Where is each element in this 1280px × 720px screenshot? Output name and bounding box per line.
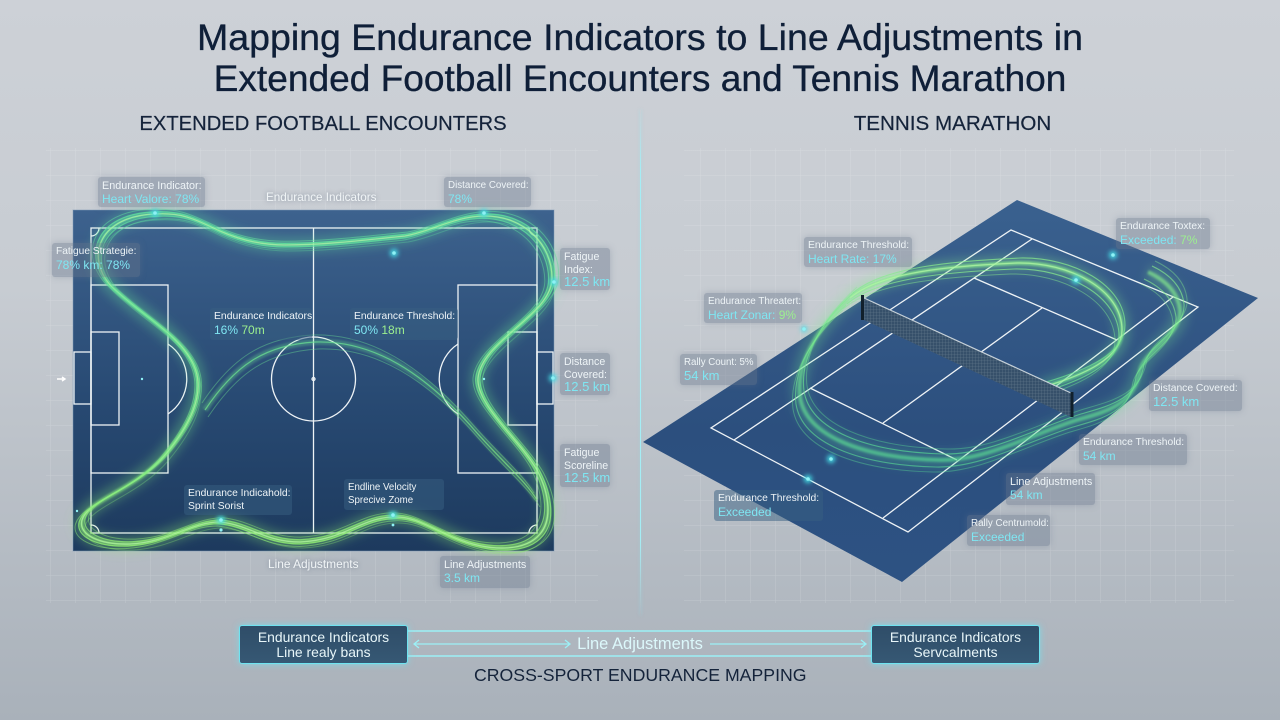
callout: line adjustments: 54 km <box>1010 488 1043 502</box>
callout: heart zone: Heart Zonar: 9% <box>708 308 796 322</box>
callout: distance right <box>560 353 610 395</box>
callout: heart value <box>98 177 205 207</box>
endurance flow: football <box>75 209 559 554</box>
callout: threshold on pitch <box>350 308 458 340</box>
callout: distance covered: Distance Covered: <box>448 180 529 191</box>
callout: threshold on pitch: Endurance Threshold: <box>354 311 455 322</box>
callout: fatigue <box>52 243 140 277</box>
pitch markings <box>74 228 553 533</box>
callout: fatigue scoreline: Fatigue <box>564 447 599 459</box>
callout: heart zone: Endurance Threatert: <box>708 296 801 307</box>
callout: fatigue: Fatigue Strategie: <box>56 246 136 257</box>
callout: threshold on pitch: 50% 18m <box>354 323 405 337</box>
callout: sprint <box>184 485 292 515</box>
callout: heart rate: Heart Rate: 17% <box>808 252 897 266</box>
label: line adjustments: Line Adjustments <box>268 557 359 571</box>
callout: exceeded top: Endurance Toxtex: <box>1120 221 1205 232</box>
data points: tennis <box>801 251 1117 483</box>
callout: velocity: Sprecive Zome <box>348 495 413 506</box>
callout: line adjustments: 3.5 km <box>444 571 480 585</box>
callout: rally exceeded: Exceeded <box>971 530 1024 544</box>
callout: fatigue scoreline: Scoreline <box>564 460 608 472</box>
box: right endpoint <box>871 625 1040 664</box>
callout: fatigue index: Fatigue <box>564 251 599 263</box>
box: right endpoint: Endurance Indicators <box>890 629 1021 645</box>
data points: football <box>76 209 558 532</box>
pitch surface <box>73 210 554 551</box>
panel: tennis court <box>643 148 1258 603</box>
grid: football backdrop <box>46 148 598 603</box>
box: left endpoint <box>239 625 408 664</box>
callout: exceeded top <box>1116 218 1210 249</box>
callout: heart value: Endurance Indicator: <box>102 180 202 192</box>
title <box>197 16 1083 99</box>
callout: threshold km <box>1079 434 1187 465</box>
callout: threshold exceeded: Endurance Threshold: <box>718 493 819 504</box>
callout: heart rate <box>804 237 912 267</box>
box: left endpoint: Line realy bans <box>276 644 371 660</box>
callout: distance covered <box>444 177 531 207</box>
callout: threshold exceeded: Exceeded <box>718 505 771 519</box>
callout: fatigue index: Index: <box>564 264 593 276</box>
callout: line adjustments <box>1006 473 1095 505</box>
callout: heart rate: Endurance Threshold: <box>808 240 909 251</box>
callout: distance covered <box>1149 380 1242 411</box>
endurance flow: tennis <box>792 258 1187 472</box>
callout: exceeded top: Exceeded: 7% <box>1120 233 1197 247</box>
callout: fatigue index <box>560 248 610 290</box>
callout: rally exceeded: Rally Centrumold: <box>971 518 1049 529</box>
net <box>862 295 1072 417</box>
grid: tennis backdrop <box>684 148 1234 603</box>
vertical divider <box>640 110 641 615</box>
title: Mapping Endurance Indicators to Line Adjustments in <box>197 16 1083 58</box>
caption: CROSS-SPORT ENDURANCE MAPPING <box>474 665 807 685</box>
label: endurance indicators: Endurance Indicators <box>266 191 376 204</box>
callout: rally count <box>680 354 757 385</box>
title: Extended Football Encounters and Tennis Marathon <box>214 57 1066 99</box>
callout: fatigue: 78% km: 78% <box>56 258 130 272</box>
callout: distance covered: 78% <box>448 192 472 206</box>
callout: fatigue scoreline: 12.5 km <box>564 470 610 485</box>
callout: distance covered: Distance Covered: <box>1153 383 1238 394</box>
callout: sprint: Sprint Sorist <box>188 501 244 512</box>
callout: rally count: Rally Count: 5% <box>684 357 753 368</box>
callout: velocity: Endline Velocity <box>348 482 416 493</box>
callout: threshold km: Endurance Threshold: <box>1083 437 1184 448</box>
box: left endpoint: Endurance Indicators <box>258 629 389 645</box>
callout: indicators on pitch <box>210 308 312 340</box>
callout: distance right: Distance <box>564 356 605 368</box>
callout: distance right: Covered: <box>564 369 607 381</box>
callout: indicators on pitch: Endurance Indicators <box>214 311 312 322</box>
label: line adjustments: Line Adjustments <box>577 635 703 653</box>
panel: cross-sport mapping <box>236 622 1044 685</box>
callout: heart value: Heart Valore: 78% <box>102 192 199 206</box>
connector rails and arrows <box>408 630 871 657</box>
court markings <box>711 230 1198 532</box>
callout: indicators on pitch: 16% 70m <box>214 323 265 337</box>
callout: distance right: 12.5 km <box>564 379 610 394</box>
callout: threshold km: 54 km <box>1083 449 1116 463</box>
callout: line adjustments <box>440 556 530 588</box>
callout: fatigue index: 12.5 km <box>564 274 610 289</box>
heading: tennis: TENNIS MARATHON <box>854 112 1051 135</box>
heading: football: EXTENDED FOOTBALL ENCOUNTERS <box>139 113 507 135</box>
panel: football pitch <box>46 148 612 603</box>
callout: heart zone <box>704 293 802 323</box>
callout: fatigue scoreline <box>560 444 610 487</box>
callout: threshold exceeded <box>714 490 823 521</box>
callout: rally count: 54 km <box>684 368 719 383</box>
callout: line adjustments: Line Adjustments <box>1010 476 1092 488</box>
callout: line adjustments: Line Adjustments <box>444 559 526 571</box>
callout: sprint: Endurance Indicahold: <box>188 488 290 499</box>
box: right endpoint: Servcalments <box>913 644 998 660</box>
callout: velocity <box>344 479 444 510</box>
callout: rally exceeded <box>967 515 1050 546</box>
icon: arrow marker <box>57 377 65 381</box>
callout: distance covered: 12.5 km <box>1153 394 1199 409</box>
court surface <box>643 200 1258 582</box>
